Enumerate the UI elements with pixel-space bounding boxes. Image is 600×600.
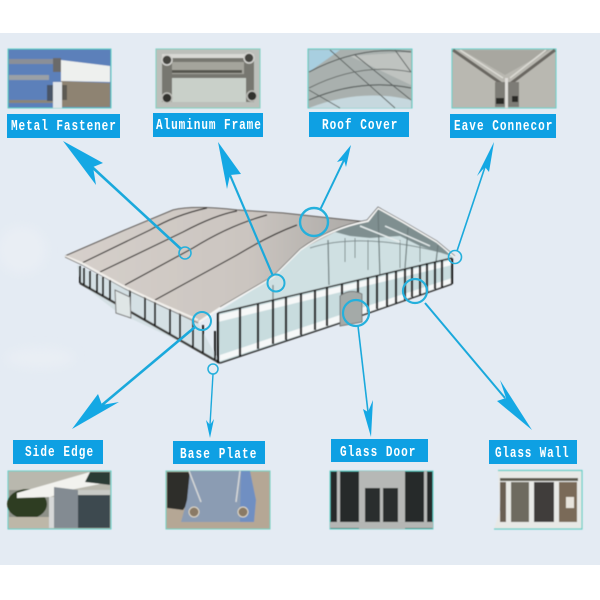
panel: side edge <box>7 440 111 529</box>
panel: aluminum frame <box>153 49 263 137</box>
label: base plate: Base Plate <box>180 446 257 462</box>
building: frame tent <box>65 207 455 363</box>
callout: base plate arrow <box>206 364 218 438</box>
callout: eave connector arrow <box>448 142 494 264</box>
photo: eave connector <box>452 49 556 108</box>
label: roof cover: Roof Cover <box>322 117 397 133</box>
panel: roof cover <box>308 49 412 137</box>
label: metal fastener: Metal Fastener <box>11 118 116 134</box>
label: eave connector: Eave Connecor <box>454 118 552 134</box>
photo: side edge <box>7 471 111 529</box>
photo: metal fastener <box>8 49 111 108</box>
panel: eave connector <box>450 49 556 138</box>
decorative pale speckle <box>0 226 74 368</box>
photo: glass door <box>330 471 433 529</box>
callout: glass wall arrow <box>403 279 532 430</box>
panel: glass wall <box>489 440 583 529</box>
photo: aluminum frame <box>156 49 260 108</box>
gable end glazing <box>218 208 455 312</box>
photo: base plate <box>166 471 270 529</box>
panel: glass door <box>330 439 433 529</box>
label: glass wall: Glass Wall <box>495 445 569 461</box>
left side wall <box>77 265 220 363</box>
panel: base plate <box>166 441 270 529</box>
panel: metal fastener <box>7 49 120 138</box>
callout: aluminum frame arrow <box>218 142 284 292</box>
callout: roof cover arrow <box>300 145 351 236</box>
photo: glass wall <box>494 470 583 529</box>
roof panels <box>65 207 455 323</box>
callout: glass door arrow <box>343 300 373 437</box>
label: glass door: Glass Door <box>340 444 415 460</box>
callout: metal fastener arrow <box>63 141 191 259</box>
label: aluminum frame: Aluminum Frame <box>156 117 261 133</box>
front glass wall <box>218 258 452 363</box>
photo: roof cover <box>308 49 412 108</box>
label: side edge: Side Edge <box>25 444 93 460</box>
callout: side edge arrow <box>72 312 211 429</box>
